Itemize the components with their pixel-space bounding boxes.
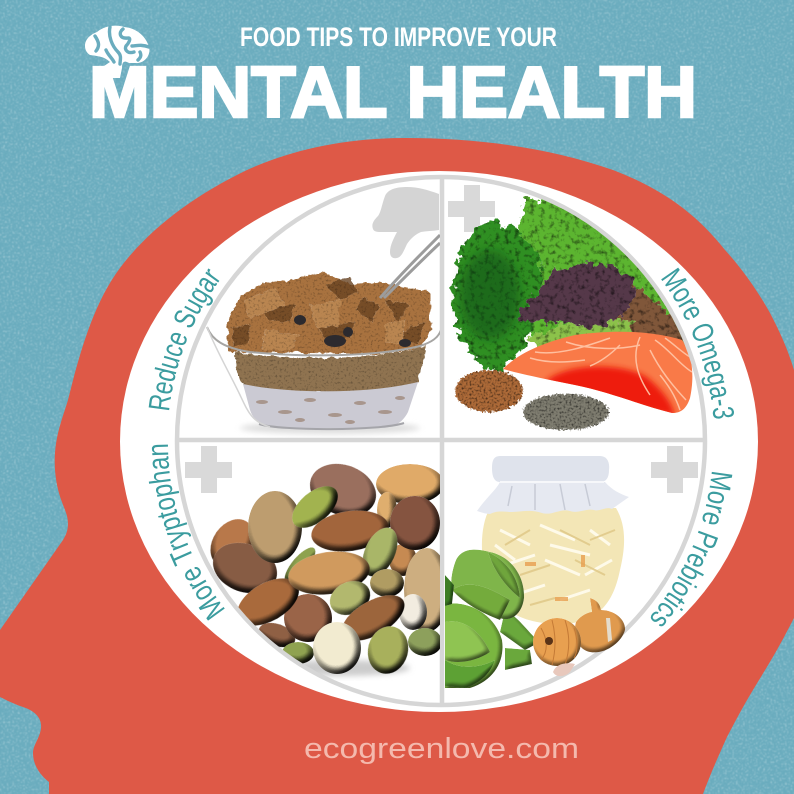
- panel: more tryptophan: [148, 444, 440, 679]
- label: more omega-3: More Omega-3: [661, 268, 734, 419]
- artichokes: [445, 550, 540, 688]
- cereal bowl: [207, 235, 441, 434]
- label: more prebiotics: More Prebiotics: [650, 472, 732, 626]
- panel: more prebiotics: [445, 446, 732, 688]
- title: mental health: MENTAL HEALTH: [89, 53, 697, 133]
- greens and salmon: [452, 198, 692, 430]
- icon: thumbs down: [372, 187, 439, 258]
- title: food tips line: FOOD TIPS TO IMPROVE YOUR: [240, 22, 557, 52]
- icon: brain: [85, 26, 149, 78]
- panel: more omega-3: [448, 185, 734, 432]
- plate ring and quadrant dividers: [177, 177, 705, 705]
- mixed nuts: [210, 464, 440, 679]
- icon: plus: [185, 446, 232, 493]
- jar, artichokes and onions: [445, 456, 629, 688]
- icon: plus: [448, 185, 495, 232]
- icon: plus: [651, 446, 698, 493]
- white plate ellipse: [120, 171, 758, 712]
- onions: [533, 598, 625, 676]
- label: more tryptophan: More Tryptophan: [148, 444, 225, 621]
- label: reduce sugar: Reduce Sugar: [148, 268, 220, 410]
- website footer: ecogreenlove.com: [304, 733, 579, 765]
- panel: reduce sugar: [148, 187, 440, 436]
